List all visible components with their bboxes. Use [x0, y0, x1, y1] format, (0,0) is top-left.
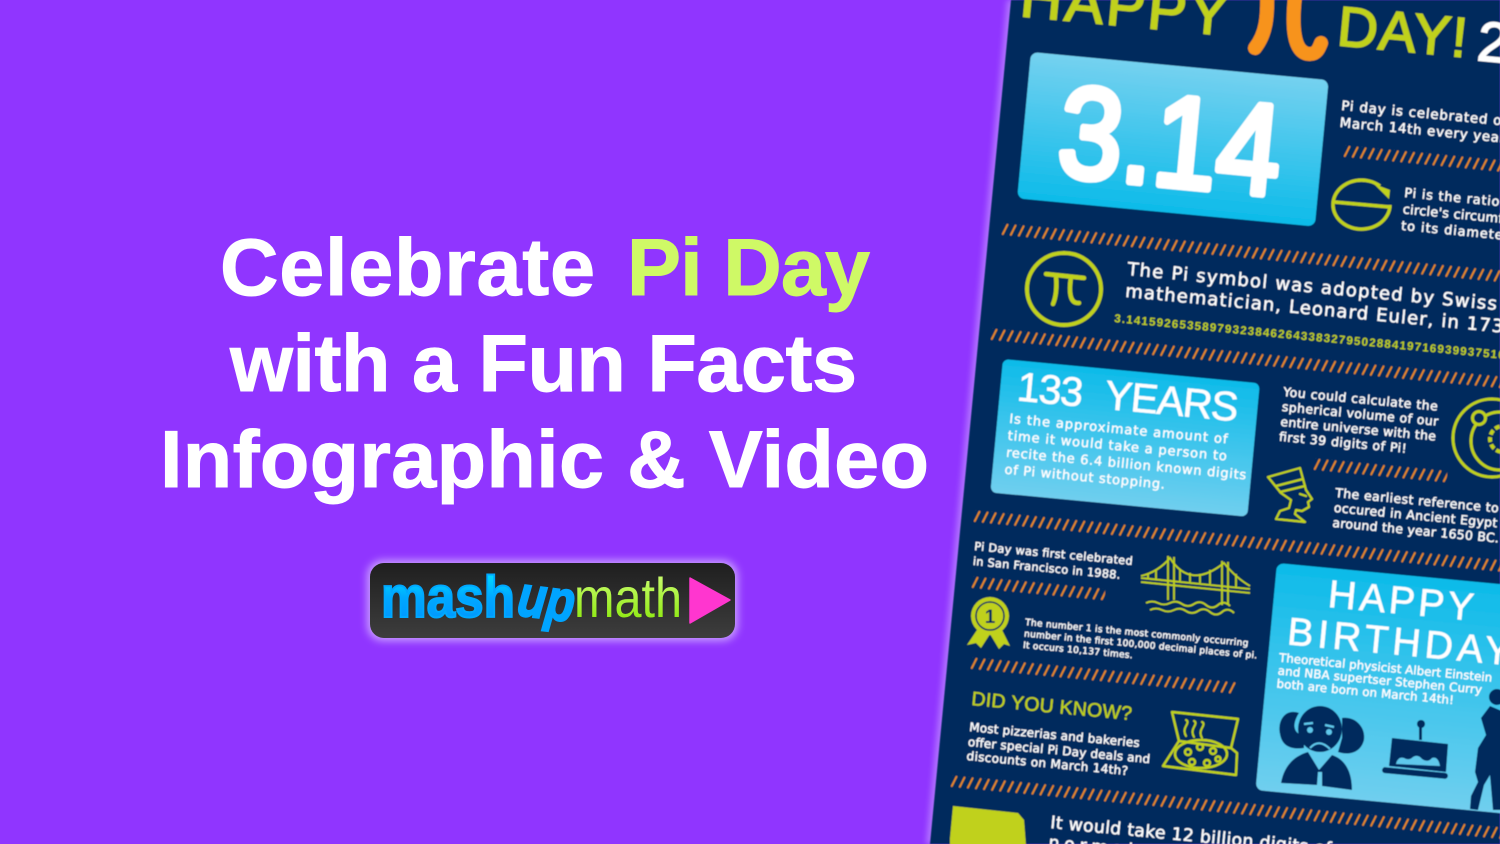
card: 133 years: recite the 6.4 billion known digits — [1005, 446, 1247, 483]
headline — [160, 223, 929, 505]
icon: einstein — [1279, 706, 1364, 790]
icon: first place ribbon: 1 — [985, 607, 996, 628]
icon: kansas — [950, 806, 1026, 844]
hatch divider — [973, 510, 1500, 573]
fact: ancient egypt: occured in Ancient Egypt — [1333, 500, 1498, 530]
hatch divider — [971, 576, 1105, 601]
pi digits: 3.14159265358979323846264338327950288419716939937510 — [1114, 313, 1500, 362]
icon: nefertiti — [1268, 468, 1312, 522]
fact: universe — [1277, 384, 1441, 459]
icon: solar system — [1453, 399, 1500, 477]
icon: golden gate bridge — [1141, 556, 1250, 614]
fact: number 1: number in the first 100,000 decimal places of pi. — [1024, 629, 1258, 661]
headline: Pi Day — [627, 223, 870, 313]
headline: Infographic & Video — [160, 415, 929, 505]
fact: pi symbol: The Pi symbol was adopted by Swiss — [1126, 259, 1498, 315]
fact: ancient egypt: around the year 1650 BC. — [1332, 515, 1500, 546]
card: happy birthday: and NBA supertser Stephen Curry — [1277, 664, 1483, 697]
card: 133 years: 133 — [1015, 364, 1085, 416]
fact: universe: spherical volume of our — [1281, 399, 1440, 429]
hatch divider — [1001, 223, 1500, 284]
hatch divider — [990, 328, 1500, 389]
card: 133 years: YEARS — [1103, 372, 1241, 430]
hatch divider — [950, 775, 1500, 840]
icon: pizza box — [1163, 712, 1238, 775]
icon: first place ribbon — [967, 597, 1010, 649]
fact: pi day date — [1339, 99, 1500, 147]
fact: san francisco: in San Francisco in 1988. — [972, 555, 1121, 582]
card: 3.14: 3.14 — [1053, 59, 1287, 224]
card: 133 years: of Pi without stopping. — [1004, 463, 1166, 493]
card: 133 years — [990, 359, 1260, 517]
fact: universe: You could calculate the — [1282, 384, 1438, 414]
fact: ancient egypt — [1331, 485, 1500, 547]
fact: number 1: It occurs 10,137 times. — [1023, 641, 1133, 661]
icon: pi in circle — [1027, 253, 1101, 325]
card: happy birthday: Theoretical physicist Albert Einstein — [1277, 651, 1493, 685]
card: happy birthday: both are born on March 14th! — [1276, 677, 1455, 707]
fact: pizzerias: offer special Pi Day deals and — [967, 735, 1151, 766]
fact: universe: entire universe with the — [1280, 414, 1437, 444]
icon: pi symbol orange — [1255, 0, 1332, 54]
card: happy birthday — [1256, 563, 1500, 817]
logo: mashupmath — [367, 560, 738, 641]
logo: mashupmath: math — [574, 566, 682, 629]
panel edge glow — [926, 0, 1018, 844]
headline: Celebrate — [220, 223, 595, 313]
fact: universe: first 39 digits of Pi! — [1278, 429, 1407, 456]
fact: pizzerias: discounts on March 14th? — [966, 749, 1129, 778]
hatch divider — [1313, 458, 1447, 483]
icon: birthday cake — [1382, 720, 1448, 779]
card: 133 years: Is the approximate amount of — [1009, 412, 1229, 447]
fact: pizzerias: Most pizzerias and bakeries — [969, 720, 1140, 750]
hatch divider — [970, 657, 1238, 694]
fact: san francisco: Pi Day was first celebrated — [974, 540, 1133, 568]
card: 133 years: time it would take a person to — [1007, 429, 1228, 464]
fact: san francisco — [972, 540, 1133, 583]
logo: mashupmath: up — [514, 563, 579, 635]
fact: number 1 — [1022, 618, 1259, 673]
infographic title — [1018, 0, 1500, 75]
icon: circle with diameter — [1333, 180, 1390, 229]
heading: did you know: DID YOU KNOW? — [971, 688, 1133, 725]
icon: basketball player — [1470, 689, 1500, 810]
infographic panel — [930, 0, 1500, 844]
logo: mashupmath: mash — [381, 565, 515, 630]
headline: with a Fun Facts — [229, 319, 857, 409]
fact: pizzerias — [966, 720, 1152, 780]
hatch divider — [1343, 145, 1500, 173]
fact: number 1: The number 1 is the most commonly occurring — [1024, 618, 1249, 649]
fact: pi ratio — [1401, 186, 1500, 248]
card: happy birthday: HAPPY — [1326, 573, 1476, 630]
